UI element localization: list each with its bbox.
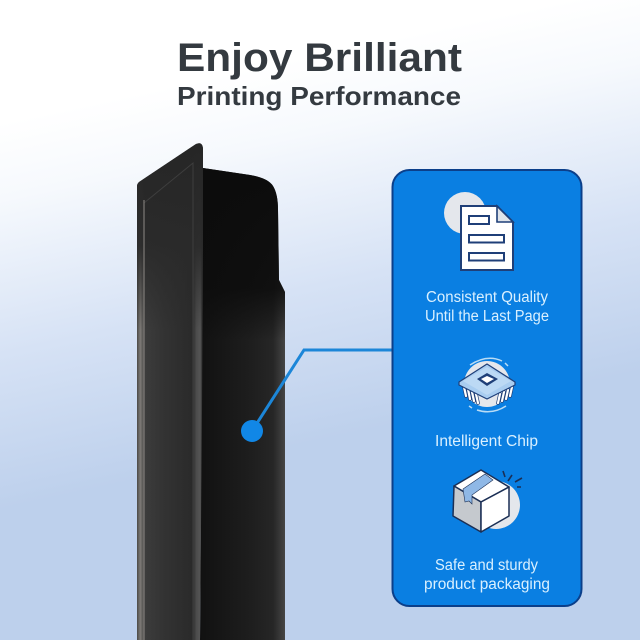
icon: package box	[453, 470, 522, 532]
title line 2: Printing Performance	[177, 81, 461, 111]
box left side	[453, 486, 481, 532]
text: intelligent chip: Intelligent Chip	[435, 433, 538, 450]
cartridge front inner edge	[144, 163, 193, 640]
box tape	[463, 474, 493, 504]
text: safe and sturdy: product packaging	[424, 576, 550, 593]
cartridge left highlight	[143, 200, 145, 640]
chip core	[477, 373, 498, 386]
chip pins	[464, 387, 512, 403]
icon: document	[444, 192, 513, 270]
panel background	[392, 170, 582, 606]
chip top face	[463, 367, 511, 395]
cartridge front face	[137, 143, 203, 640]
text: safe and sturdy	[424, 557, 550, 593]
panel: features	[392, 170, 582, 606]
title	[177, 36, 462, 111]
text: consistent quality: Until the Last Page	[425, 308, 549, 325]
cartridge side top shading	[200, 168, 285, 340]
text: consistent quality: Consistent Quality	[426, 289, 548, 306]
title line 1: Enjoy Brilliant	[177, 36, 462, 80]
product: black toner cartridge	[137, 143, 285, 640]
box top	[454, 470, 509, 502]
text: consistent quality	[425, 289, 549, 325]
callout connector and dot	[241, 350, 393, 442]
cartridge top shading	[137, 143, 203, 330]
sparkle lines	[503, 471, 522, 487]
cartridge side body	[200, 168, 285, 640]
text: safe and sturdy: Safe and sturdy	[435, 557, 538, 574]
icon: chip	[459, 358, 515, 412]
chip body	[459, 364, 515, 399]
box right side	[481, 487, 509, 532]
